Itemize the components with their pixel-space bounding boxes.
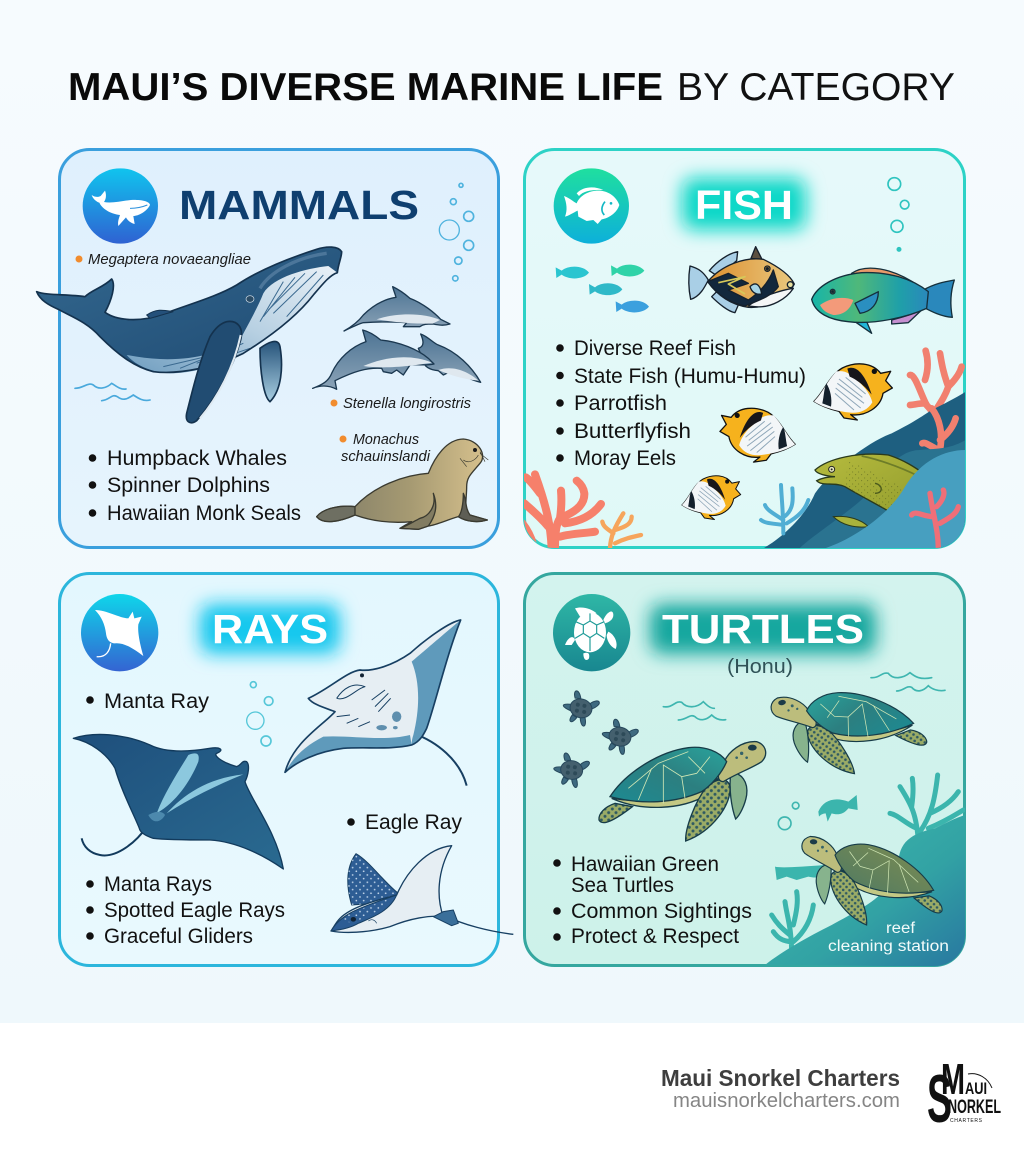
fish list: Butterflyfish [574,420,691,443]
fish list: Diverse Reef Fish [574,337,736,360]
spinner dolphins [313,287,481,389]
mammals list: Spinner Dolphins [107,474,270,497]
light manta ray [285,620,467,786]
turtles heading: TURTLES [662,606,864,652]
footer brand text: mauisnorkelcharters.com [673,1090,900,1112]
species label: Stenella longirostris: Stenella longirostris [343,396,471,412]
reef scenery [765,775,965,967]
species label: Megaptera novaeangliae: Megaptera novaeangliae [88,252,251,268]
fish heading: FISH [695,182,793,228]
species label: Monachus schauinslandi: Monachus [353,432,419,448]
bubbles [439,183,474,281]
logo: Maui Snorkel Charters [927,1055,1001,1137]
rays labels: Eagle Ray [365,811,462,834]
fish card background [524,150,964,548]
mammals card background [60,150,498,548]
panel: turtles [524,574,965,967]
icon: ray badge [81,594,158,671]
title: MAUI’S DIVERSE MARINE LIFE [68,66,663,109]
rays labels [86,690,462,834]
fish list [556,337,806,470]
humpback whale [37,247,342,423]
footer band [0,1023,1024,1154]
turtles list: Protect & Respect [571,925,739,948]
fish list: Parrotfish [574,392,667,415]
turtles list: Sea Turtles [571,874,674,897]
rays card background [60,574,498,966]
panel: fish [522,150,966,550]
small turtle silhouette [818,795,858,822]
bubbles [888,178,909,251]
moray eel [815,454,928,527]
logo: Maui Snorkel Charters: M [941,1055,965,1104]
species label: Monachus schauinslandi [340,432,431,465]
turtles card background [524,574,964,966]
small bubbles [778,802,799,830]
rays list: Graceful Gliders [104,925,253,948]
title: BY CATEGORY [677,66,955,109]
honu subtitle: (Honu) [727,656,793,678]
fish heading [682,178,806,230]
fish list: State Fish (Humu-Humu) [574,365,806,388]
species label: Monachus schauinslandi: schauinslandi [341,449,431,465]
green sea turtle upper right [769,674,930,786]
icon: turtle badge [553,594,630,671]
spotted eagle ray [331,846,513,934]
parrotfish [812,268,954,333]
footer brand text [661,1065,900,1112]
footer brand text: Maui Snorkel Charters [661,1065,900,1091]
reef cleaning station label: reef [886,920,916,937]
mammals list: Hawaiian Monk Seals [107,502,301,525]
waves [663,673,945,720]
turtles list [553,853,752,948]
logo: Maui Snorkel Charters: CHARTERS [950,1118,983,1124]
panel: mammals [37,150,499,548]
dark manta ray [73,734,283,869]
reef cleaning station label: cleaning station [828,938,949,955]
reef cleaning station label [828,920,949,955]
rays heading: RAYS [212,606,328,652]
logo: Maui Snorkel Charters: S [927,1061,952,1137]
rays list [86,873,285,948]
rays labels: Manta Ray [104,690,210,713]
reef scenery [522,351,966,550]
turtles list: Common Sightings [571,900,752,923]
mammals list: Humpback Whales [107,447,287,470]
rays list: Spotted Eagle Rays [104,899,285,922]
turtles list: Hawaiian Green [571,853,719,876]
mammals list [89,447,301,525]
school of small fish [556,265,649,312]
fish list: Moray Eels [574,447,676,470]
icon: fish badge [554,168,629,244]
waves [75,383,150,401]
logo: Maui Snorkel Charters: AUI [965,1079,987,1098]
title [68,66,955,109]
monk seal [317,439,488,529]
baby turtles [551,688,640,789]
panel: rays [60,574,513,966]
butterflyfish [682,364,892,520]
mammals heading: MAMMALS [179,182,419,228]
icon: whale badge [83,168,158,244]
humuhumu triggerfish [689,247,794,313]
bubbles [247,682,273,746]
green sea turtle large [599,742,766,841]
rays list: Manta Rays [104,873,212,896]
green sea turtle at cleaning station [798,836,946,929]
